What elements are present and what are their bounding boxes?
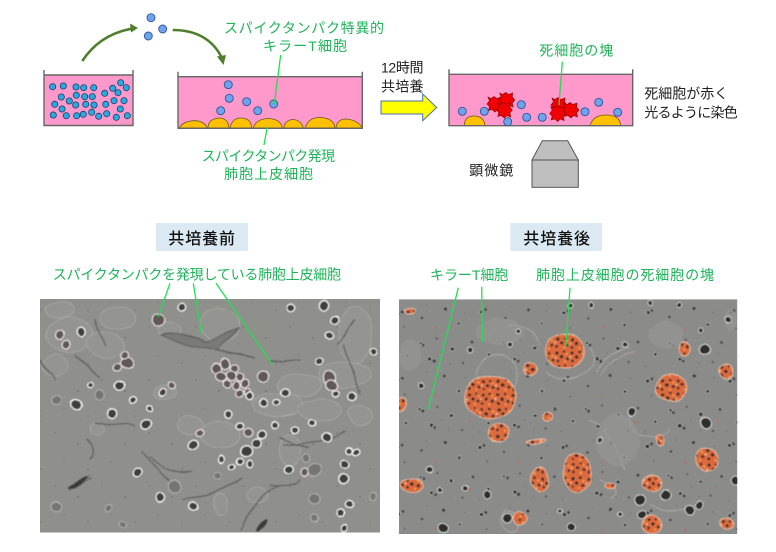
- panel: co-culture dish with killer T cells and epithelial cells: [178, 72, 362, 128]
- icon: red dead-cell clump left: [487, 92, 515, 118]
- big cell cluster: [212, 358, 251, 397]
- label: 12 hours co-culture: 共培養: [381, 78, 424, 94]
- micrograph: after co-culture: [399, 299, 738, 534]
- panel: source dish with cells: [44, 70, 133, 126]
- text: dead cells stained red: [644, 85, 738, 120]
- label: lung epithelial cells expressing spike: スパイクタンパクを発現している肺胞上皮細胞: [53, 266, 341, 282]
- leader lines for the before micrograph: [158, 283, 272, 364]
- heading: after co-culture: 共培養後: [523, 230, 590, 248]
- icon: red dead-cell clump right: [550, 98, 579, 122]
- label: microscope: 顕微鏡: [469, 163, 513, 179]
- icon: three isolated killer T cells: [144, 14, 167, 40]
- icon: microscope: [532, 141, 578, 187]
- label: spike-expressing lung epithelial cells: 肺胞上皮細胞: [224, 166, 313, 182]
- label: spike-specific killer T cell: [224, 20, 384, 104]
- green curved arrow: cells taken from the first dish: [82, 24, 138, 61]
- label: dead-cell clump of lung epithelial cells: 肺胞上皮細胞の死細胞の塊: [536, 267, 714, 283]
- label: spike-expressing lung epithelial cells: [202, 127, 335, 182]
- arrow: yellow block arrow: [381, 94, 437, 121]
- label: 12 hours co-culture: 12時間: [381, 60, 424, 76]
- micrograph: before co-culture: [40, 299, 380, 533]
- heading: before co-culture: [156, 223, 248, 251]
- label: 12 hours co-culture: [381, 60, 424, 94]
- text: dead cells stained red: 光るように染色: [644, 104, 738, 120]
- label: spike-expressing lung epithelial cells: スパイクタンパク発現: [202, 148, 335, 164]
- heading: after co-culture: [510, 223, 602, 251]
- panel: dish after co-culture with dead-cell clumps: [449, 69, 633, 126]
- green curved arrow: cells added to the second dish: [173, 30, 226, 65]
- text: dead cells stained red: 死細胞が赤く: [644, 85, 728, 101]
- label: killer T cell: キラーT細胞: [430, 267, 508, 283]
- leader lines for the after micrograph: [428, 287, 570, 409]
- label: dead cell clump: [539, 42, 613, 105]
- label: dead cell clump: 死細胞の塊: [539, 42, 613, 58]
- label: spike-specific killer T cell: キラーT細胞: [263, 38, 347, 54]
- heading: before co-culture: 共培養前: [168, 230, 235, 248]
- label: spike-specific killer T cell: スパイクタンパク特異的: [224, 20, 384, 36]
